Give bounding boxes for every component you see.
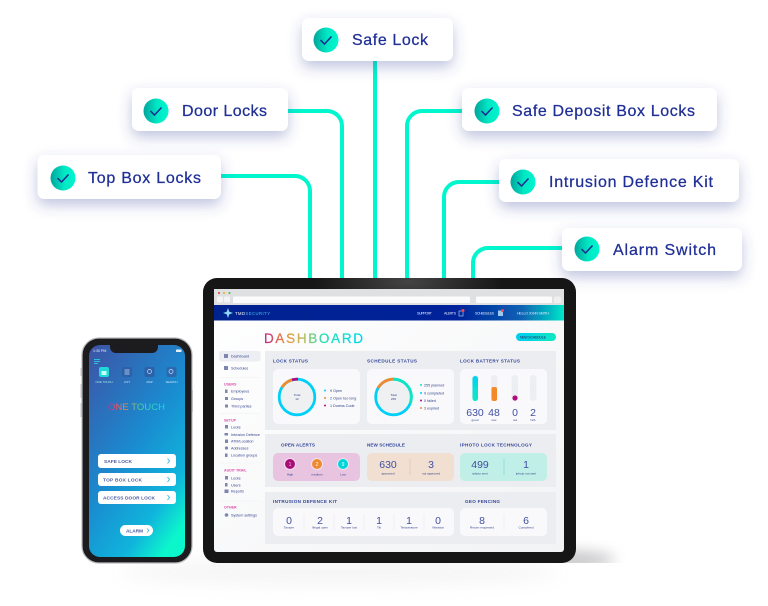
geo fencing card xyxy=(460,508,547,536)
status row panel: LOCK BATTERY STATUS xyxy=(460,358,520,364)
sidebar: Users xyxy=(231,484,241,488)
intrusion card: 1 xyxy=(406,515,412,527)
intrusion card: Temperature xyxy=(400,526,418,530)
intrusion card: 0 xyxy=(435,515,441,527)
iphoto card xyxy=(460,453,547,481)
battery status card: out xyxy=(513,418,517,422)
sidebar: Employees xyxy=(231,390,249,394)
schedule status card: 3 expired xyxy=(424,406,439,410)
intrusion card: 1 xyxy=(376,515,382,527)
tablet body xyxy=(203,278,576,563)
tablet screen xyxy=(214,289,564,552)
open alerts card: medium xyxy=(311,472,323,476)
alerts row panel: IPHOTO LOCK TECHNOLOGY xyxy=(460,442,532,448)
lock status card: 12 xyxy=(295,397,299,401)
button: top box lock: TOP BOX LOCK xyxy=(103,477,143,483)
status row panel: SCHEDULE STATUS xyxy=(367,358,417,364)
intrusion card: Vibration xyxy=(432,526,444,530)
intrusion card: Tamper lost xyxy=(341,526,357,530)
callout: Safe Lock xyxy=(302,18,453,61)
sidebar: System settings xyxy=(231,514,257,518)
iphoto card: 499 xyxy=(471,459,489,471)
callout: Alarm Switch xyxy=(562,228,742,271)
callout: Door Locks: Door Locks xyxy=(182,103,267,120)
lock status card xyxy=(273,369,360,424)
open alerts card: 1 xyxy=(289,462,292,468)
schedule status card xyxy=(367,369,454,424)
status bar xyxy=(93,349,182,353)
iphoto card: 1 xyxy=(523,459,529,471)
iphoto card: iphoto not sent xyxy=(516,472,536,476)
callout: Alarm Switch: Alarm Switch xyxy=(613,242,716,259)
battery status card: 2 xyxy=(530,407,536,419)
sidebar: Dashboard xyxy=(231,354,249,358)
tablet xyxy=(203,278,576,563)
schedule status card: 255 planned xyxy=(424,384,444,388)
sidebar: Locks xyxy=(231,476,241,480)
sidebar: Intrusion Defence xyxy=(231,433,260,437)
navigation bar: SUPPORT xyxy=(417,312,433,316)
tab: search: SEARCH xyxy=(166,380,178,384)
alarm button: ALARM xyxy=(126,528,143,534)
phone xyxy=(81,338,192,563)
sidebar xyxy=(219,351,260,518)
ground shadow xyxy=(280,544,617,574)
navigation bar: TMDSECURITY xyxy=(235,311,270,316)
schedule status card: Total xyxy=(390,393,397,397)
connector lines xyxy=(221,61,562,280)
schedule status card: 9 completed xyxy=(424,392,444,396)
open alerts card xyxy=(273,453,360,481)
lock status card: 2 Open too long xyxy=(330,396,356,400)
button: top box lock xyxy=(98,473,176,486)
status row panel xyxy=(265,351,556,430)
geo fencing card: Completed xyxy=(519,526,534,530)
open alerts card: High xyxy=(287,472,293,476)
navigation bar: HELLO JOHN SMITH xyxy=(517,312,549,316)
phone screen xyxy=(89,345,185,557)
tab: one touch xyxy=(95,367,113,384)
iphoto card: iphoto sent xyxy=(472,472,488,476)
alerts row panel: NEW SCHEDULE xyxy=(367,442,405,448)
phone body xyxy=(82,338,192,563)
sidebar: Groups xyxy=(231,397,243,401)
alerts row panel: OPEN ALERTS xyxy=(281,442,315,448)
callout: Safe Deposit Box Locks: Safe Deposit Box Locks xyxy=(512,103,695,120)
navigation bar: ALERTS xyxy=(444,312,457,316)
lock status card: 9 Open xyxy=(330,389,342,393)
sidebar: USERS xyxy=(224,382,237,386)
sidebar: SETUP xyxy=(224,418,237,422)
menu icon xyxy=(94,360,100,364)
tab: list: LIST xyxy=(124,380,130,384)
geo fencing card: 6 xyxy=(523,515,529,527)
battery status card: 630 xyxy=(466,407,484,419)
tab: map xyxy=(144,367,154,384)
notch xyxy=(110,345,158,353)
new schedule card xyxy=(367,453,454,481)
tab: list xyxy=(122,367,132,384)
schedule status card: 0 failed xyxy=(424,399,436,403)
lock status card: 1 Duress Code xyxy=(330,404,355,408)
button: access door lock: ACCESS DOOR LOCK xyxy=(103,495,156,501)
tab: map: MAP xyxy=(146,380,153,384)
open alerts card: Low xyxy=(340,472,347,476)
intrusion row panel: GEO FENCING xyxy=(465,499,500,504)
one touch title: ONE TOUCH xyxy=(108,402,165,413)
tab: search xyxy=(166,367,178,384)
callout: Top Box Locks xyxy=(38,155,221,199)
intrusion card: 0 xyxy=(286,515,292,527)
callout: Safe Lock: Safe Lock xyxy=(352,32,429,49)
open alerts card: 9 xyxy=(342,462,345,468)
sidebar: OTHER xyxy=(224,506,237,510)
open alerts card: 2 xyxy=(316,462,319,468)
sidebar: Location groups xyxy=(231,454,257,458)
new schedule card: approved xyxy=(382,472,395,476)
intrusion row panel xyxy=(265,492,556,544)
status row panel: LOCK STATUS xyxy=(273,358,308,364)
sidebar: Third parties xyxy=(231,404,252,408)
lock status card: Total xyxy=(294,393,301,397)
sidebar: AUDIT TRAIL xyxy=(224,468,247,472)
callout: Door Locks xyxy=(132,88,288,131)
navigation bar xyxy=(214,305,564,320)
battery status card: low xyxy=(492,418,497,422)
alerts row panel xyxy=(265,434,556,487)
battery status card: 0 xyxy=(512,407,518,419)
callout: Safe Deposit Box Locks xyxy=(462,88,717,131)
intrusion card: Tamper xyxy=(284,526,294,530)
callout: Top Box Locks: Top Box Locks xyxy=(88,170,201,187)
new schedule button xyxy=(516,333,556,341)
battery status card: N/A xyxy=(530,418,537,422)
button: access door lock xyxy=(98,491,176,504)
navigation bar: SCHEDULES xyxy=(475,312,495,316)
geo fencing card: Return requested xyxy=(470,526,494,530)
phone side buttons xyxy=(81,368,192,417)
intrusion card: 1 xyxy=(346,515,352,527)
intrusion card: Tilt xyxy=(377,526,381,530)
sidebar: Addresses xyxy=(231,446,249,450)
sidebar: ATM/Location xyxy=(231,440,253,444)
dashboard title: DASHBOARD xyxy=(264,331,363,346)
new schedule card: not approved xyxy=(422,472,440,476)
new schedule card: 630 xyxy=(379,459,397,471)
schedule status card: 265 xyxy=(391,397,396,401)
tab: one touch: ONE TOUCH xyxy=(95,380,113,384)
alarm button xyxy=(120,525,153,536)
callout: Intrusion Defence Kit xyxy=(499,159,739,202)
sidebar: Schedules xyxy=(231,366,248,370)
intrusion row panel: INTRUSION DEFENCE KIT xyxy=(273,499,337,504)
battery status card xyxy=(460,369,547,424)
geo fencing card: 8 xyxy=(479,515,485,527)
intrusion card xyxy=(273,508,454,536)
callout: Intrusion Defence Kit: Intrusion Defence Kit xyxy=(549,174,714,191)
button: safe lock: SAFE LOCK xyxy=(104,459,133,465)
intrusion card: 2 xyxy=(317,515,323,527)
sidebar: Reports xyxy=(231,490,244,494)
new schedule button: NEW SCHEDULE xyxy=(520,336,547,340)
intrusion card: Illegal open xyxy=(312,526,328,530)
battery status card: good xyxy=(472,418,479,422)
battery status card: 48 xyxy=(488,407,500,419)
new schedule card: 3 xyxy=(428,459,434,471)
status bar: 1:30 PM xyxy=(93,349,106,353)
sidebar: Locks xyxy=(231,426,241,430)
browser chrome xyxy=(214,289,564,305)
button: safe lock xyxy=(98,454,176,468)
